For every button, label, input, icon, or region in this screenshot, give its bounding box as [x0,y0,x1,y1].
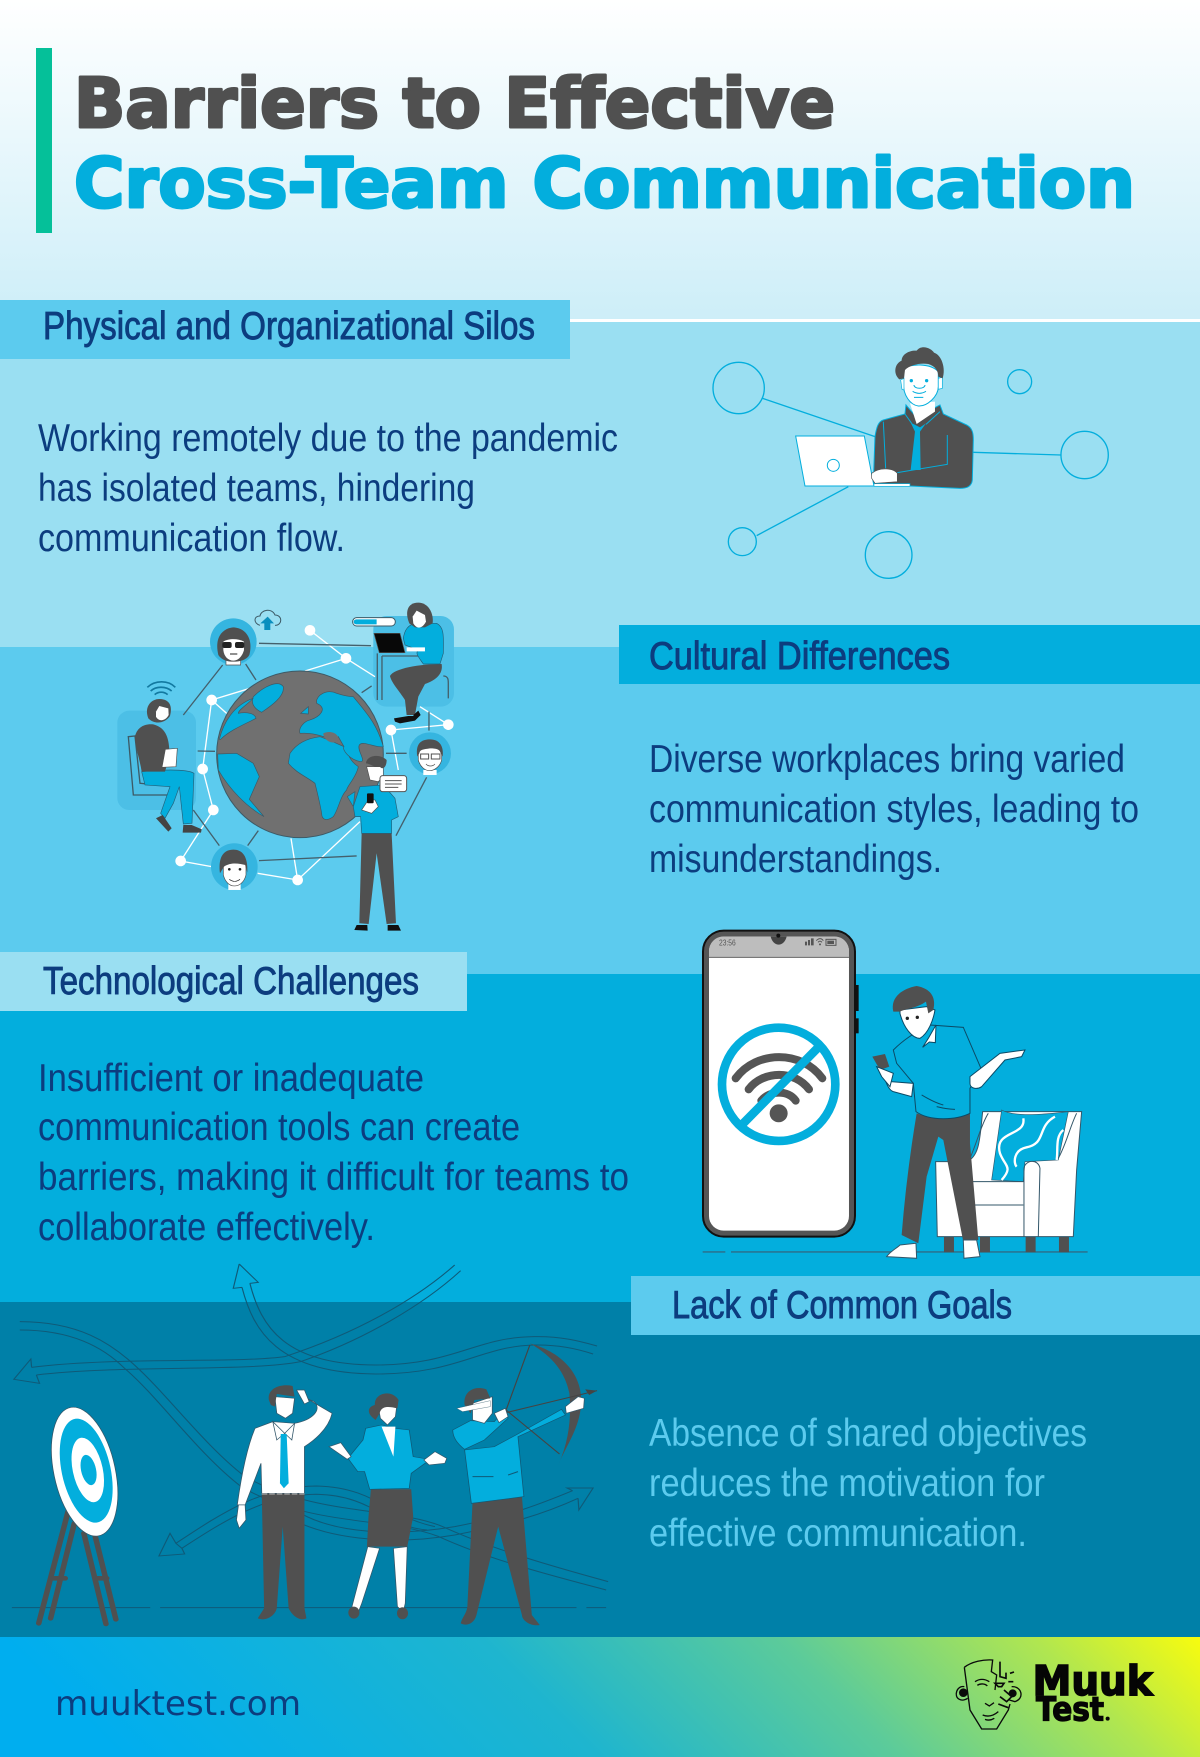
body text: Working remotely due to the pandemic [38,417,618,460]
body text: communication tools can create [38,1106,520,1149]
heading bar [0,300,570,359]
panel: cultural differences [117,603,1200,931]
figure: seated woman with tablet [128,699,202,833]
icon: globe [217,671,383,838]
body text [38,1057,629,1249]
ground line [703,1250,1088,1254]
icon: face, woman with sunglasses [210,618,257,665]
logo: MuukTest: Test [1036,1690,1104,1729]
title line 1: Barriers to Effective [74,64,835,144]
panel: technological challenges [0,931,1088,1258]
illustration: remote team around the globe [117,603,454,931]
logo wordmark: Muuk [1033,1657,1154,1705]
icon: face, man with glasses [409,732,451,775]
body text: reduces the motivation for [649,1462,1045,1505]
figure: confused man [872,986,1025,1258]
icon: wifi [147,682,175,695]
footer gradient bar [0,1637,1200,1757]
illustration: blindfolded archer, team and target [12,1264,608,1625]
heading bar [619,625,1200,684]
heading: Physical and Organizational Silos [43,305,535,348]
heading: Technological Challenges [43,960,419,1003]
figure: woman at laptop [374,603,448,723]
figure: confused man in white shirt [236,1385,332,1619]
heading bar [631,1276,1200,1335]
figure: armchair [936,1110,1082,1252]
body text: Insufficient or inadequate [38,1057,424,1100]
body text: misunderstandings. [649,838,942,881]
icon: upload cloud [255,610,281,630]
figure: woman in blue jacket [329,1393,447,1619]
heading bar [0,952,467,1011]
body text: communication styles, leading to [649,788,1139,831]
title block [36,48,1135,233]
website url: muuktest.com [55,1684,301,1724]
illustration: phone without wifi and confused man [703,931,1088,1258]
figure: standing man with phone [353,756,407,931]
illustration: man at laptop with network nodes [713,347,1108,578]
ground line [12,1606,606,1609]
panel: physical and organizational silos [0,300,1108,578]
heading: Lack of Common Goals [672,1284,1012,1327]
figure: blindfolded archer [453,1343,597,1625]
icon: half-robot face [956,1660,1021,1729]
body text: communication flow. [38,517,345,560]
heading: Cultural Differences [649,635,950,678]
tangled arrows [14,1264,608,1590]
icon: face, young man [211,843,258,890]
body text [38,417,618,560]
body text: barriers, making it difficult for teams to [38,1156,629,1199]
logo: MuukTest [956,1657,1154,1729]
icon: no wifi [722,1028,835,1141]
body text [649,738,1139,881]
panel: lack of common goals [12,1264,1200,1625]
footer [0,1637,1200,1757]
icon: progress bar [353,618,395,626]
body text: Diverse workplaces bring varied [649,738,1125,781]
body text: collaborate effectively. [38,1206,375,1249]
title line 2: Cross-Team Communication [74,144,1135,224]
icon: smartphone [703,931,859,1237]
body text: has isolated teams, hindering [38,467,475,510]
icon: smartphone: 23:56 [719,938,736,948]
icon: target on easel [39,1403,128,1624]
body text: Absence of shared objectives [649,1412,1087,1455]
body text: effective communication. [649,1512,1027,1555]
title accent bar [36,48,52,233]
body text [649,1412,1087,1555]
